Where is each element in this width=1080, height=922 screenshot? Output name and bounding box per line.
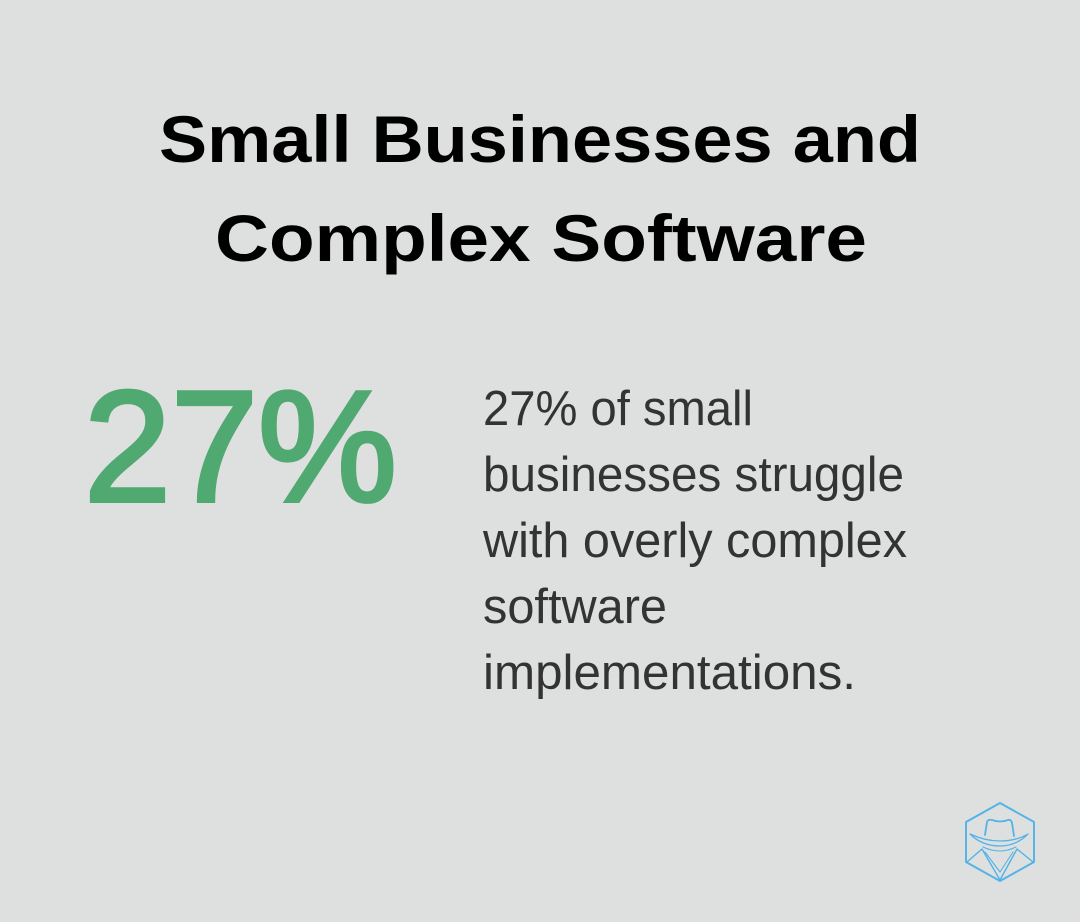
description text [482, 382, 907, 700]
icon: logo hexagon with hat-wearing spy [966, 803, 1034, 881]
description text: 27% of small [483, 382, 753, 436]
description text: software [483, 580, 667, 634]
description text: implementations. [483, 646, 856, 700]
big statistic: 27%: 27% [84, 359, 397, 535]
title: Complex Software [215, 201, 867, 275]
description text: with overly complex [482, 514, 907, 568]
description text: businesses struggle [483, 448, 904, 502]
title [159, 102, 921, 275]
title: Small Businesses and [159, 102, 921, 176]
